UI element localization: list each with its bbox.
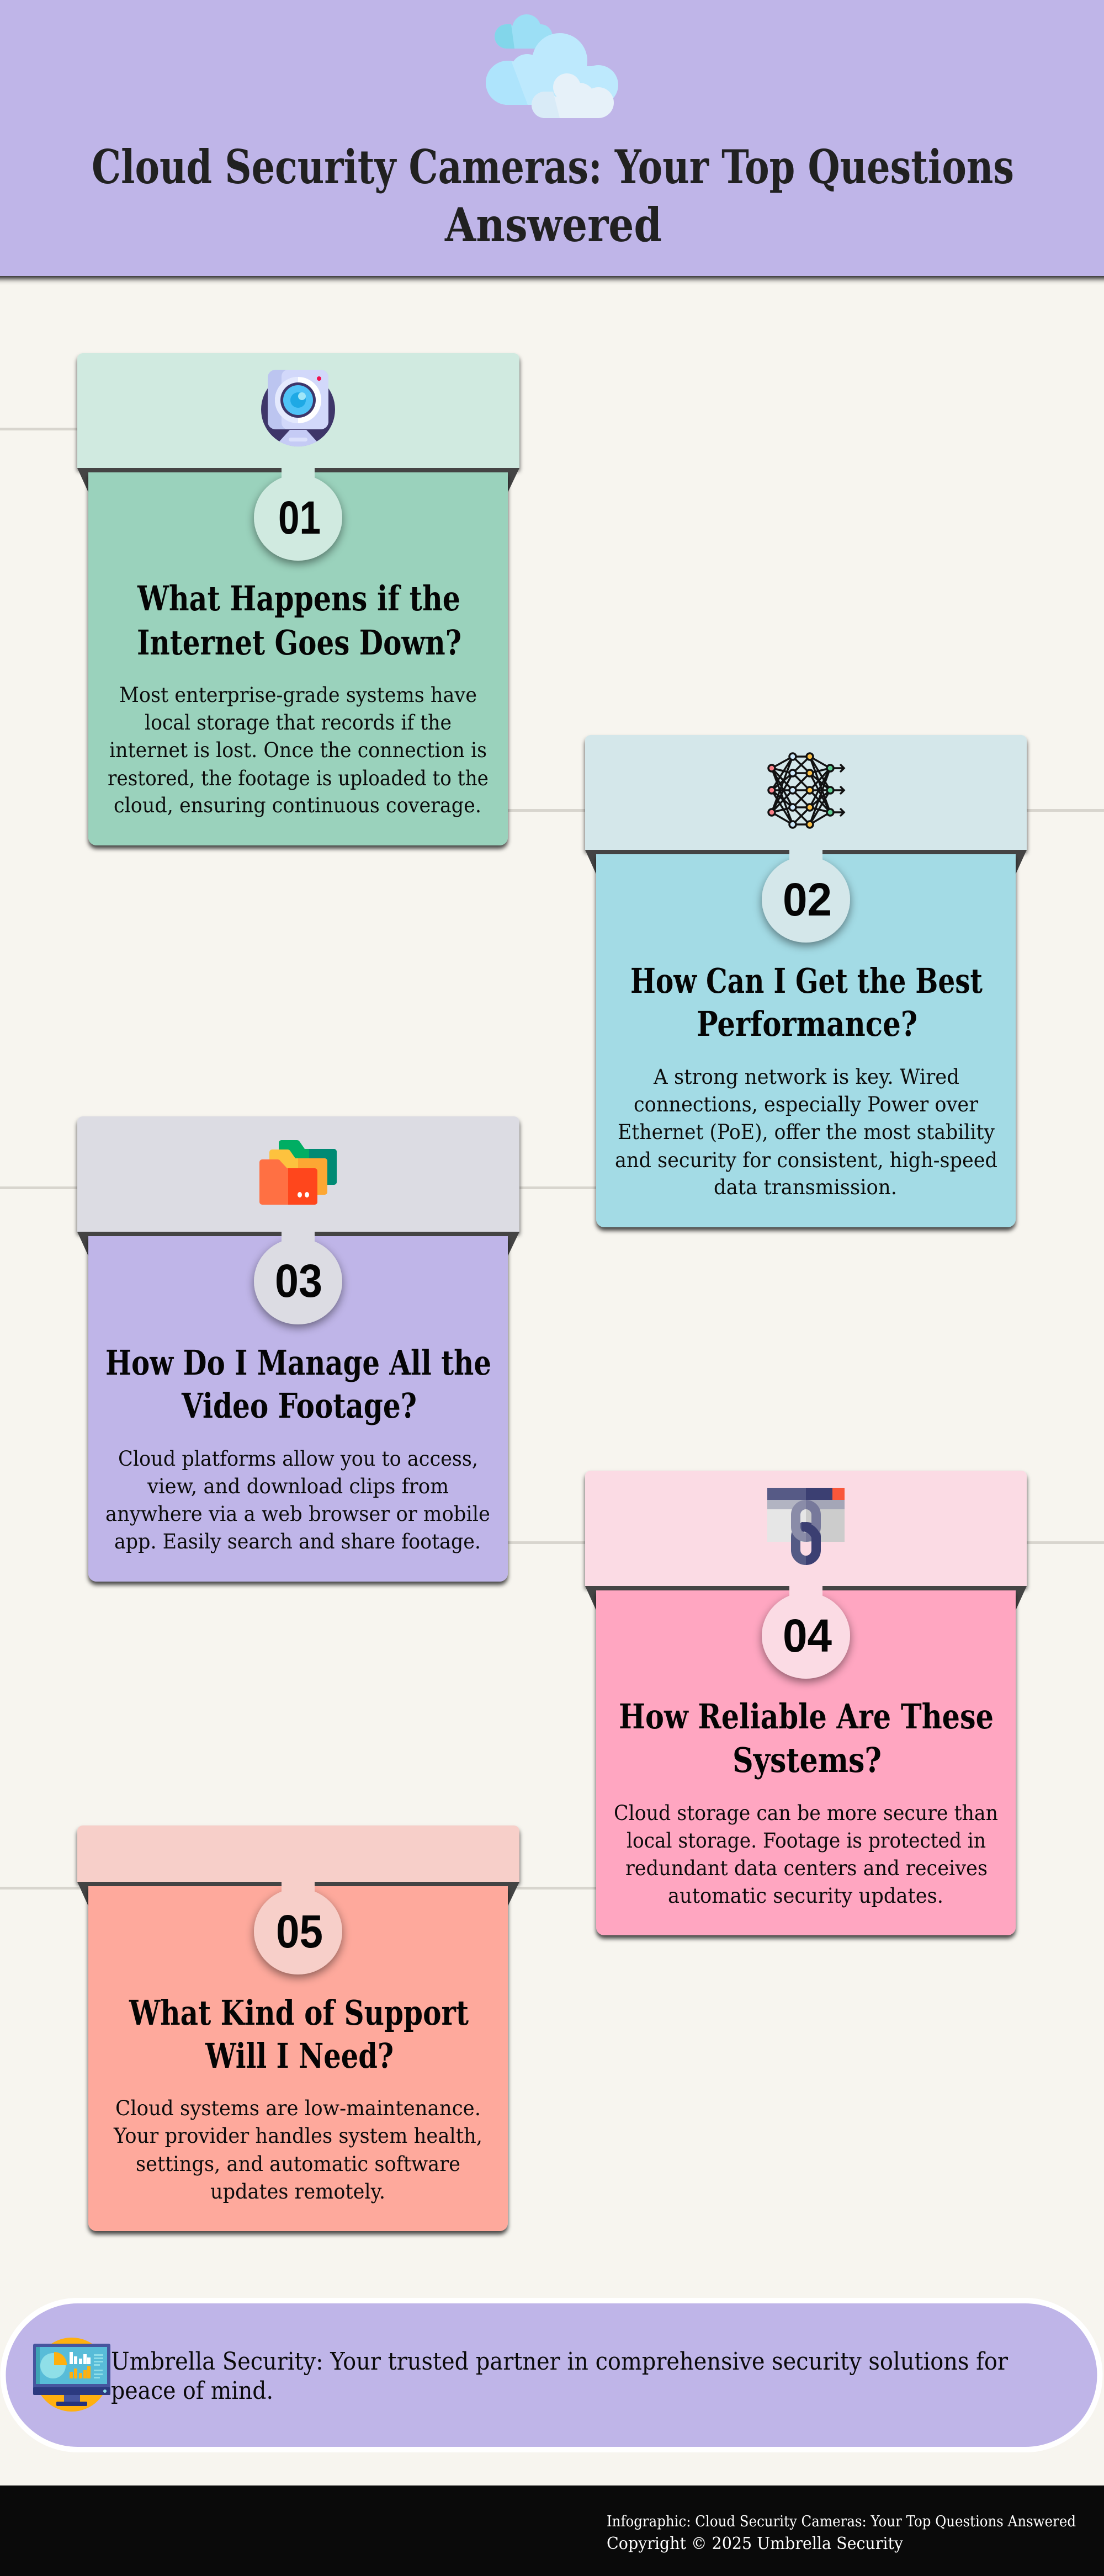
card body 01: [88, 472, 508, 845]
text block 02: data transmission.: [714, 1175, 897, 1199]
text block 05: updates remotely.: [210, 2180, 385, 2204]
text block 01: internet is lost. Once the connection is: [109, 738, 487, 762]
heading 03: [105, 1343, 491, 1426]
text block 04: Cloud storage can be more secure than: [614, 1801, 998, 1825]
number badge 04: [762, 1585, 850, 1679]
icon: monitor dashboard: [33, 2338, 110, 2412]
card top band 01: [77, 353, 519, 468]
card top band 04: [585, 1471, 1027, 1586]
heading 04: How Reliable Are These: [619, 1696, 994, 1737]
heading 04: [619, 1696, 994, 1780]
panel: question 05: [77, 1825, 519, 2231]
text block 05: settings, and automatic software: [136, 2152, 460, 2176]
panel: question 04: [585, 1471, 1027, 1935]
text block 02: A strong network is key. Wired: [653, 1065, 959, 1089]
icon: chain link on browser window: [767, 1488, 845, 1561]
text block 03: anywhere via a web browser or mobile: [105, 1502, 490, 1526]
heading 01: What Happens if the: [137, 578, 460, 619]
number badge 02: [762, 849, 850, 943]
text block 01: Most enterprise-grade systems have: [119, 683, 477, 707]
text block 01: local storage that records if the: [145, 711, 452, 735]
icon: security camera: [261, 370, 335, 446]
card body 03: [88, 1236, 508, 1582]
heading 01: [137, 578, 461, 663]
number badge 04: 04: [783, 1610, 832, 1662]
text block 03: [105, 1447, 490, 1553]
heading 02: Performance?: [697, 1004, 917, 1044]
number badge 03: 03: [275, 1255, 322, 1307]
callout text: [111, 2348, 1009, 2405]
text block 02: connections, especially Power over: [634, 1093, 978, 1116]
card top band 03: [77, 1116, 519, 1232]
footer text: [607, 2513, 1076, 2553]
card body 05: [88, 1886, 508, 2231]
heading 04: Systems?: [733, 1740, 882, 1780]
heading 03: Video Footage?: [181, 1386, 417, 1426]
number badge 05: [254, 1881, 342, 1974]
panel: question 02: [585, 735, 1027, 1227]
connector lines: [0, 428, 1104, 1890]
heading 03: How Do I Manage All the: [105, 1343, 491, 1383]
header band: [0, 0, 1104, 276]
text block 02: and security for consistent, high-speed: [615, 1148, 997, 1172]
callout text: peace of mind.: [111, 2377, 273, 2405]
text block 04: redundant data centers and receives: [625, 1856, 988, 1880]
number badge 03: [254, 1231, 342, 1324]
number badge 01: [254, 467, 342, 561]
callout text: Umbrella Security: Your trusted partner in comprehensive security solutions for: [111, 2348, 1009, 2376]
heading 05: What Kind of Support: [129, 1993, 469, 2033]
card body 04: [596, 1590, 1016, 1935]
title: [92, 140, 1014, 252]
text block 01: restored, the footage is uploaded to the: [108, 767, 489, 790]
text block 01: [108, 683, 489, 817]
text block 05: [113, 2096, 482, 2204]
number badge 02: 02: [783, 874, 832, 925]
heading 02: How Can I Get the Best: [630, 961, 983, 1001]
icon: neural network: [768, 753, 844, 828]
text block 02: Ethernet (PoE), offer the most stability: [618, 1120, 995, 1144]
title: Answered: [444, 198, 662, 252]
text block 05: Your provider handles system health,: [113, 2124, 482, 2148]
text block 05: Cloud systems are low-maintenance.: [115, 2096, 481, 2120]
footer: [0, 2485, 1104, 2576]
number badge 05: 05: [276, 1906, 323, 1957]
text block 04: [614, 1801, 998, 1908]
card top band 02: [585, 735, 1027, 850]
icon: folders: [259, 1140, 337, 1205]
text block 03: Cloud platforms allow you to access,: [118, 1447, 478, 1471]
callout: brand statement: [3, 2301, 1100, 2450]
heading 05: Will I Need?: [205, 2036, 394, 2076]
panel: question 01: [77, 353, 519, 845]
icon: clouds: [486, 14, 618, 118]
heading 01: Internet Goes Down?: [137, 622, 461, 663]
panel: question 03: [77, 1116, 519, 1582]
heading 05: [129, 1993, 469, 2076]
text block 01: cloud, ensuring continuous coverage.: [114, 794, 481, 817]
text block 04: automatic security updates.: [668, 1884, 943, 1908]
footer text: Copyright © 2025 Umbrella Security: [607, 2534, 903, 2553]
heading 02: [630, 961, 983, 1044]
card body 02: [596, 854, 1016, 1227]
number badge 01: 01: [278, 492, 321, 544]
text block 03: app. Easily search and share footage.: [114, 1530, 481, 1553]
text block 03: view, and download clips from: [147, 1475, 449, 1498]
text block 04: local storage. Footage is protected in: [627, 1829, 986, 1853]
card top band 05: [77, 1825, 519, 1882]
text block 02: [615, 1065, 997, 1199]
